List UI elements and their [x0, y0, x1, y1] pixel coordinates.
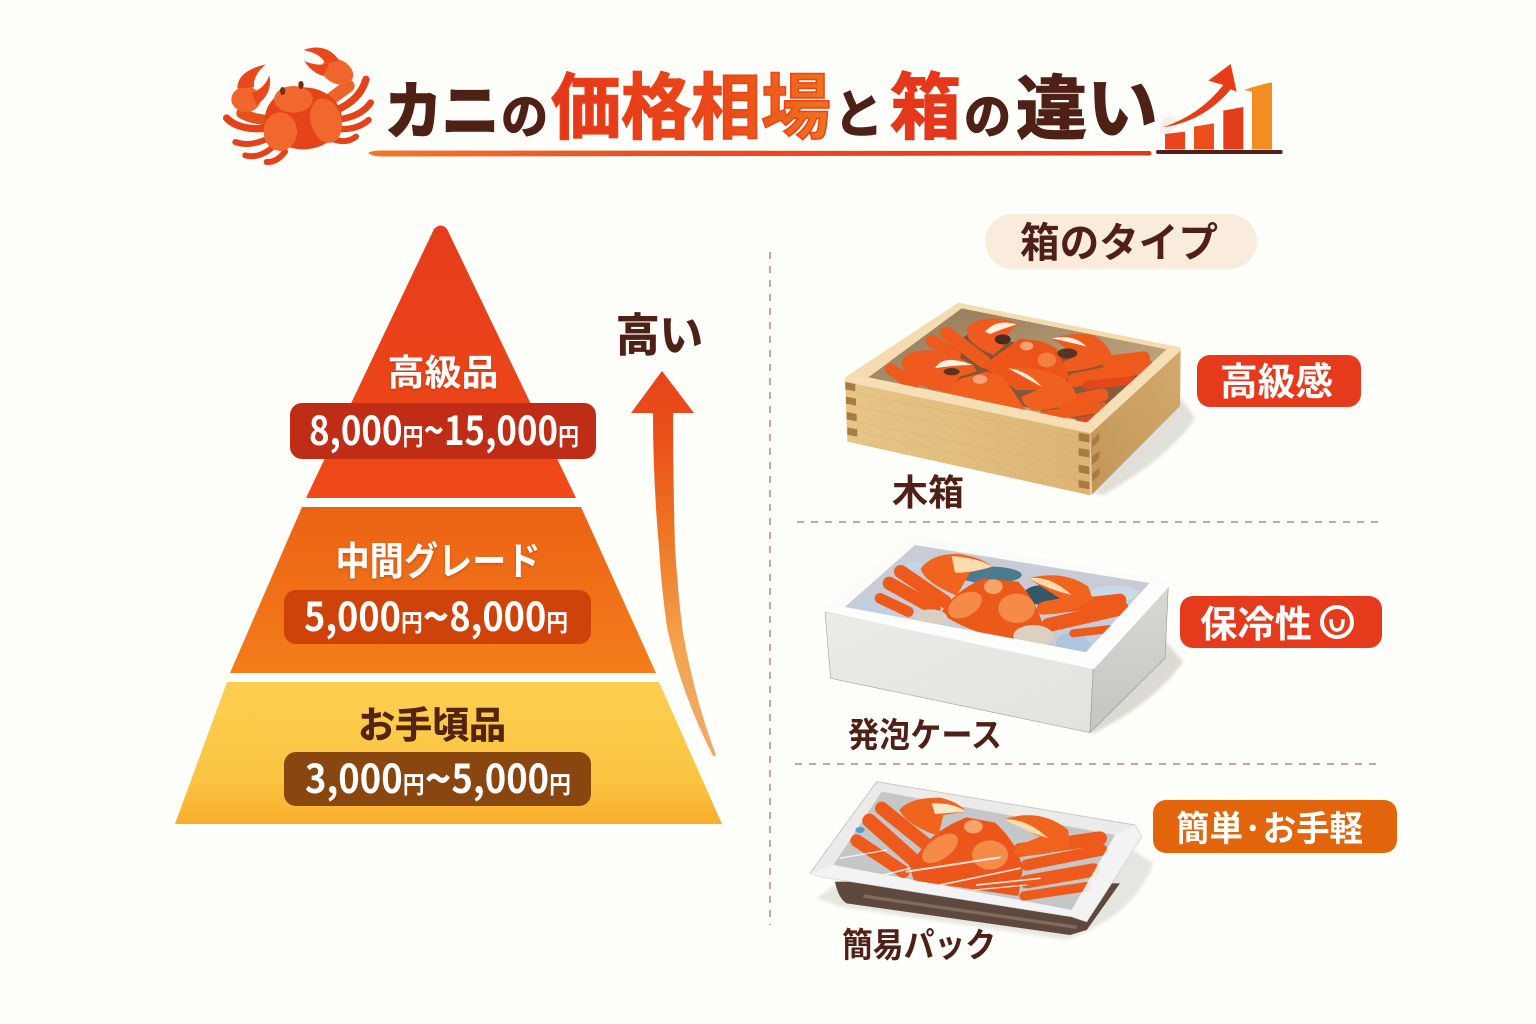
pyramid tier: mid grade: 5,000円: [304, 585, 425, 643]
pyramid tier: affordable: ~: [425, 740, 451, 812]
title underline: [368, 150, 1152, 156]
lid front edge: [810, 825, 1142, 922]
wrap highlights: [840, 850, 1040, 890]
rim: [845, 347, 1181, 433]
clear lid: [810, 782, 1142, 922]
tag: cold retention: 保冷性: [1200, 594, 1312, 648]
pyramid tier: affordable: 円: [549, 765, 571, 800]
foam front face: [825, 612, 1093, 733]
foam right face: [1090, 585, 1168, 733]
panel: simple pack: [810, 782, 1153, 940]
foam top: [825, 537, 1168, 667]
title: [385, 49, 1158, 154]
pyramid tier: mid grade: [230, 507, 656, 673]
crab in pack: [855, 798, 1102, 896]
pyramid tier: affordable: 5,000: [451, 747, 549, 805]
pyramid tier: mid grade: 円: [546, 603, 568, 638]
label: wooden box: 木箱: [892, 464, 964, 516]
icon: rising bar chart: [1156, 64, 1283, 154]
pyramid: [175, 226, 722, 824]
pyramid tier: high grade: [290, 226, 596, 498]
label: simple pack: 簡易パック: [842, 918, 996, 967]
title: の: [501, 77, 548, 147]
crabs in box: [891, 318, 1150, 422]
pyramid tier: mid grade: 中間グレード: [336, 531, 540, 587]
title: と: [834, 73, 883, 148]
arrow: price rises upward: [631, 371, 716, 756]
wood front face: [845, 381, 1091, 495]
wood right face: [1091, 350, 1181, 495]
title: 違い: [1016, 53, 1158, 154]
shadow: [817, 850, 1153, 940]
title: 価格相場: [551, 49, 831, 154]
pyramid tier: affordable: 3,000円: [305, 747, 427, 805]
tag: easy: 簡単·お手軽: [1176, 801, 1363, 852]
pyramid tier: mid grade: ~: [423, 578, 449, 650]
pyramid tier: high grade: 高級品: [388, 344, 498, 396]
shadow: [1090, 638, 1183, 733]
heading: box types: 箱のタイプ: [1020, 209, 1218, 269]
pyramid tier: affordable: お手頃品: [358, 695, 506, 749]
tag: luxury: 高級感: [1220, 351, 1333, 406]
panel: foam box: [825, 537, 1183, 733]
box interior: [845, 303, 1181, 428]
price axis label: 高い: [616, 299, 703, 364]
pyramid tier: affordable: [175, 682, 722, 824]
title: の: [964, 77, 1011, 147]
ice and crab in foam box: [858, 554, 1139, 655]
panel: wooden box: [845, 303, 1195, 495]
tag: cold retention: [1180, 594, 1382, 648]
pyramid tier: mid grade: 8,000: [449, 585, 546, 643]
pyramid tier: high grade: 8,000円~15,000円: [309, 399, 579, 457]
tag: luxury: [1197, 351, 1361, 407]
icon: crab: [227, 47, 371, 162]
title: カニ: [385, 61, 499, 151]
shadow: [1093, 397, 1195, 495]
title: 箱: [890, 49, 961, 154]
label: foam case: 発泡ケース: [848, 708, 1002, 757]
foam rim: [825, 583, 1168, 667]
icon: smile: [1322, 607, 1352, 637]
dark tray base: [835, 882, 1120, 935]
